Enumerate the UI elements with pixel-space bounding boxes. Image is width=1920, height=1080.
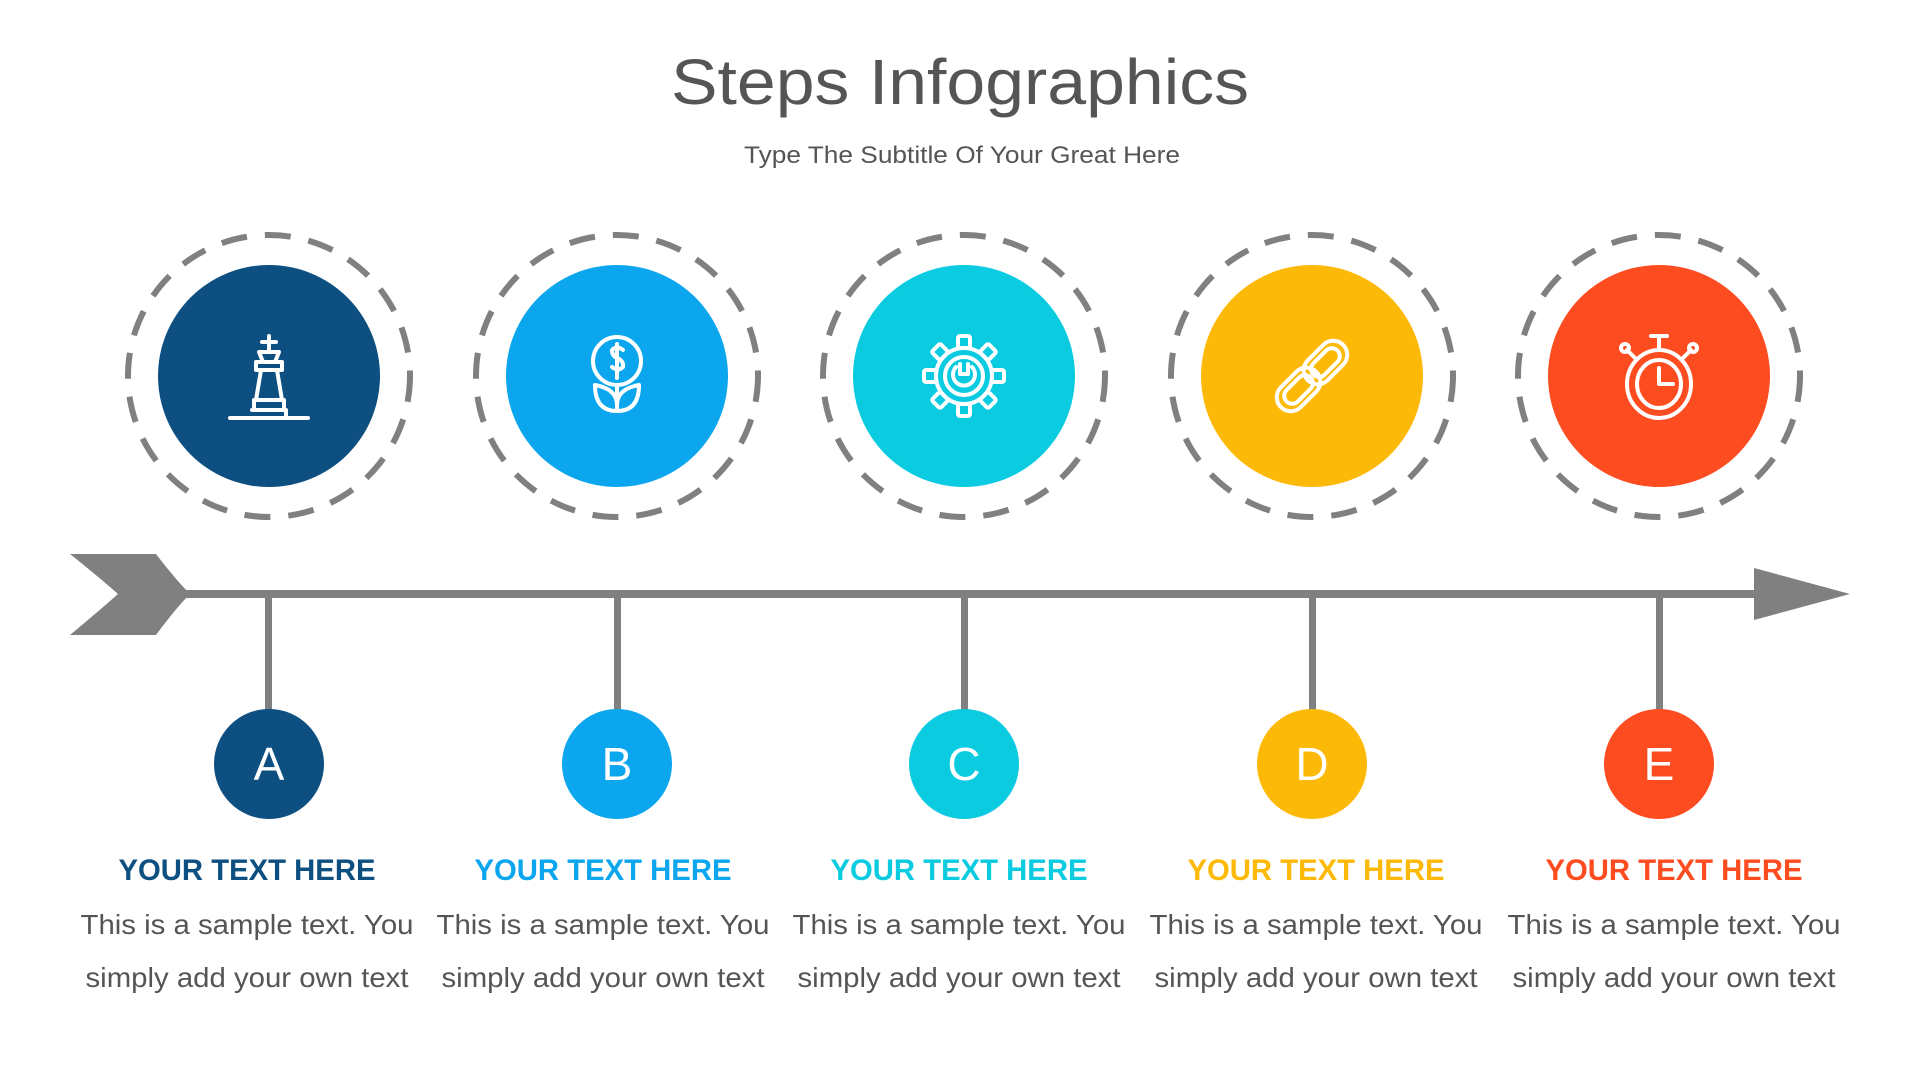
step B: B: [602, 738, 632, 790]
step D: YOUR TEXT HERE: [1188, 854, 1444, 887]
timeline arrow: [70, 554, 1850, 635]
step A: YOUR TEXT HERE: [118, 854, 376, 887]
step D: [1150, 235, 1482, 993]
step E: simply add your own text: [1512, 962, 1836, 993]
step D: This is a sample text. You: [1150, 909, 1482, 940]
icon: chess king: [230, 336, 308, 418]
step C: C: [947, 738, 981, 790]
icon: stopwatch: [1621, 336, 1697, 418]
step E: [1508, 235, 1840, 993]
step A: simply add your own text: [86, 962, 409, 993]
title: Steps Infographics: [671, 46, 1249, 118]
step C: [792, 235, 1126, 993]
step C: YOUR TEXT HERE: [830, 854, 1088, 887]
step B: This is a sample text. You: [436, 909, 770, 940]
step A: [80, 235, 414, 993]
step C: simply add your own text: [798, 962, 1121, 993]
subtitle: Type The Subtitle Of Your Great Here: [744, 142, 1180, 169]
step B: simply add your own text: [442, 962, 765, 993]
arrow tail fletching: [70, 554, 190, 635]
step C: This is a sample text. You: [792, 909, 1126, 940]
step D: D: [1295, 738, 1329, 790]
step E: E: [1644, 738, 1674, 790]
step A: This is a sample text. You: [80, 909, 414, 940]
icon: gear wrench: [924, 336, 1004, 416]
arrow head: [1754, 568, 1850, 620]
step B: YOUR TEXT HERE: [474, 854, 732, 887]
icon: money plant: [593, 337, 641, 411]
step A: A: [254, 738, 285, 790]
step E: YOUR TEXT HERE: [1546, 854, 1802, 887]
step D: simply add your own text: [1154, 962, 1478, 993]
icon: chain link: [1271, 335, 1353, 417]
step B: [436, 235, 770, 993]
step E: This is a sample text. You: [1508, 909, 1840, 940]
